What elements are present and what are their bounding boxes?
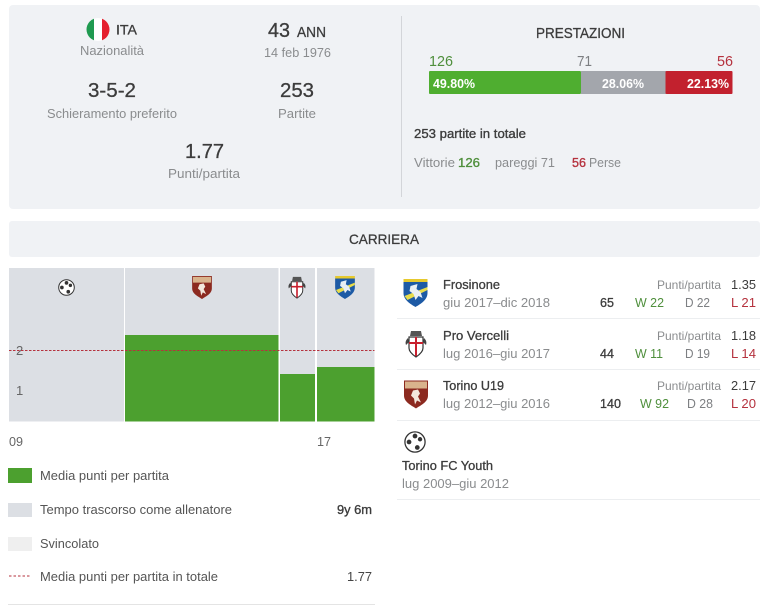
row: Pro Vercelli: Punti/partita <box>657 329 721 343</box>
chart: results stacked bar: 126 <box>429 53 453 70</box>
text: total matches: 253 partite in totale <box>414 126 526 141</box>
stat: age <box>264 20 331 60</box>
heading: career band: CARRIERA <box>349 231 420 247</box>
legend item: time as coach <box>8 502 372 517</box>
row: Torino U19: W 92 <box>640 396 669 411</box>
row: Pro Vercelli: Pro Vercelli <box>443 328 509 343</box>
row: Pro Vercelli: D 19 <box>685 346 710 361</box>
chart: points per match timeline: 09 <box>9 434 23 449</box>
row: Torino U19: Punti/partita <box>657 379 721 393</box>
stat: age: 14 feb 1976 <box>264 45 331 60</box>
chart: results stacked bar: 22.13% <box>687 76 729 91</box>
icon: Torino crest <box>192 276 212 299</box>
legend item: overall average <box>9 569 372 584</box>
row: Frosinone <box>404 277 756 310</box>
text: results summary <box>414 155 621 170</box>
row: Torino U19: L 20 <box>731 396 756 411</box>
chart: points per match timeline: 1 <box>16 383 23 398</box>
row: Torino U19: Torino U19 <box>443 378 504 393</box>
legend item: time as coach: Tempo trascorso come allenatore <box>40 502 232 517</box>
stat: points per match: 1.77 <box>185 141 224 163</box>
row: Torino U19: D 28 <box>687 396 713 411</box>
icon: Pro Vercelli crest <box>288 276 306 299</box>
row: Frosinone: L 21 <box>731 295 756 310</box>
row: Torino U19: lug 2012–giu 2016 <box>443 396 550 411</box>
legend item: time as coach: 9y 6m <box>337 502 372 517</box>
heading: performance: PRESTAZIONI <box>536 25 625 42</box>
legend item: average points per match: Media punti per partita <box>40 468 170 483</box>
text: results summary: pareggi 71 <box>495 155 555 170</box>
icon: football <box>404 431 426 453</box>
icon: Pro Vercelli crest <box>406 331 426 358</box>
stat: preferred formation: Schieramento preferito <box>47 106 177 121</box>
chart: results stacked bar: 28.06% <box>602 76 644 91</box>
row: Torino U19: 2.17 <box>731 378 756 393</box>
row: Torino U19 <box>404 378 756 411</box>
stat: age: 43 <box>268 20 290 42</box>
row: Pro Vercelli: lug 2016–giu 2017 <box>443 346 550 361</box>
stat: preferred formation <box>47 80 177 121</box>
stat: matches: 253 <box>280 80 314 102</box>
icon: Frosinone crest <box>404 279 428 307</box>
icon: Torino crest <box>404 380 428 408</box>
row: Frosinone: W 22 <box>635 295 664 310</box>
panel: profile and performance summary <box>9 5 760 209</box>
row: Pro Vercelli: L 14 <box>731 346 756 361</box>
icon: Frosinone crest <box>335 276 355 299</box>
legend item: unattached <box>8 536 99 551</box>
row: Frosinone: Frosinone <box>443 277 500 292</box>
stat: nationality <box>81 18 144 55</box>
heading: career band <box>9 221 760 257</box>
chart: results stacked bar: 56 <box>717 53 733 70</box>
legend item: unattached: Svincolato <box>40 536 99 551</box>
chart: results stacked bar <box>429 53 733 94</box>
row: Frosinone: 1.35 <box>731 277 756 292</box>
row: Pro Vercelli <box>406 328 756 361</box>
icon: football <box>58 279 75 296</box>
chart: points per match timeline: 17 <box>317 434 331 449</box>
row: Pro Vercelli: 1.18 <box>731 328 756 343</box>
stat: matches <box>278 80 316 121</box>
legend item: overall average: Media punti per partita in totale <box>40 569 218 584</box>
text: results summary: 126 <box>458 155 480 170</box>
text: results summary: 56 <box>572 155 586 170</box>
row: Torino FC Youth <box>402 432 509 491</box>
row: Frosinone: D 22 <box>685 295 710 310</box>
row: Torino FC Youth: Torino FC Youth <box>402 458 493 473</box>
row: Pro Vercelli: W 11 <box>635 346 663 361</box>
chart: points per match timeline: 2 <box>16 343 23 358</box>
row: Frosinone: 65 <box>600 295 614 310</box>
legend <box>8 468 372 584</box>
stat: matches: Partite <box>278 106 316 121</box>
stat: preferred formation: 3-5-2 <box>88 80 136 102</box>
legend item: overall average: 1.77 <box>347 569 372 584</box>
text: results summary: Perse <box>589 155 621 170</box>
row: Torino U19: 140 <box>600 396 621 411</box>
bar: Torino U19 <box>125 335 278 422</box>
row: Frosinone: giu 2017–dic 2018 <box>443 295 550 310</box>
row: Torino FC Youth: lug 2009–giu 2012 <box>402 476 509 491</box>
stat: points per match <box>168 141 241 181</box>
stat: age: ANN <box>297 24 326 41</box>
text: results summary: Vittorie <box>414 155 455 170</box>
bar: Frosinone <box>317 367 374 422</box>
stat: nationality: ITA <box>116 22 138 38</box>
stat: points per match: Punti/partita <box>168 166 241 181</box>
chart: results stacked bar: 49.80% <box>433 76 475 91</box>
row: Pro Vercelli: 44 <box>600 346 614 361</box>
bar: Pro Vercelli <box>280 374 315 422</box>
stat: nationality: Nazionalità <box>80 43 145 58</box>
chart: results stacked bar: 71 <box>577 53 592 70</box>
icon: Italian flag <box>86 18 110 41</box>
row: Frosinone: Punti/partita <box>657 278 721 292</box>
chart: points per match timeline <box>9 268 374 449</box>
